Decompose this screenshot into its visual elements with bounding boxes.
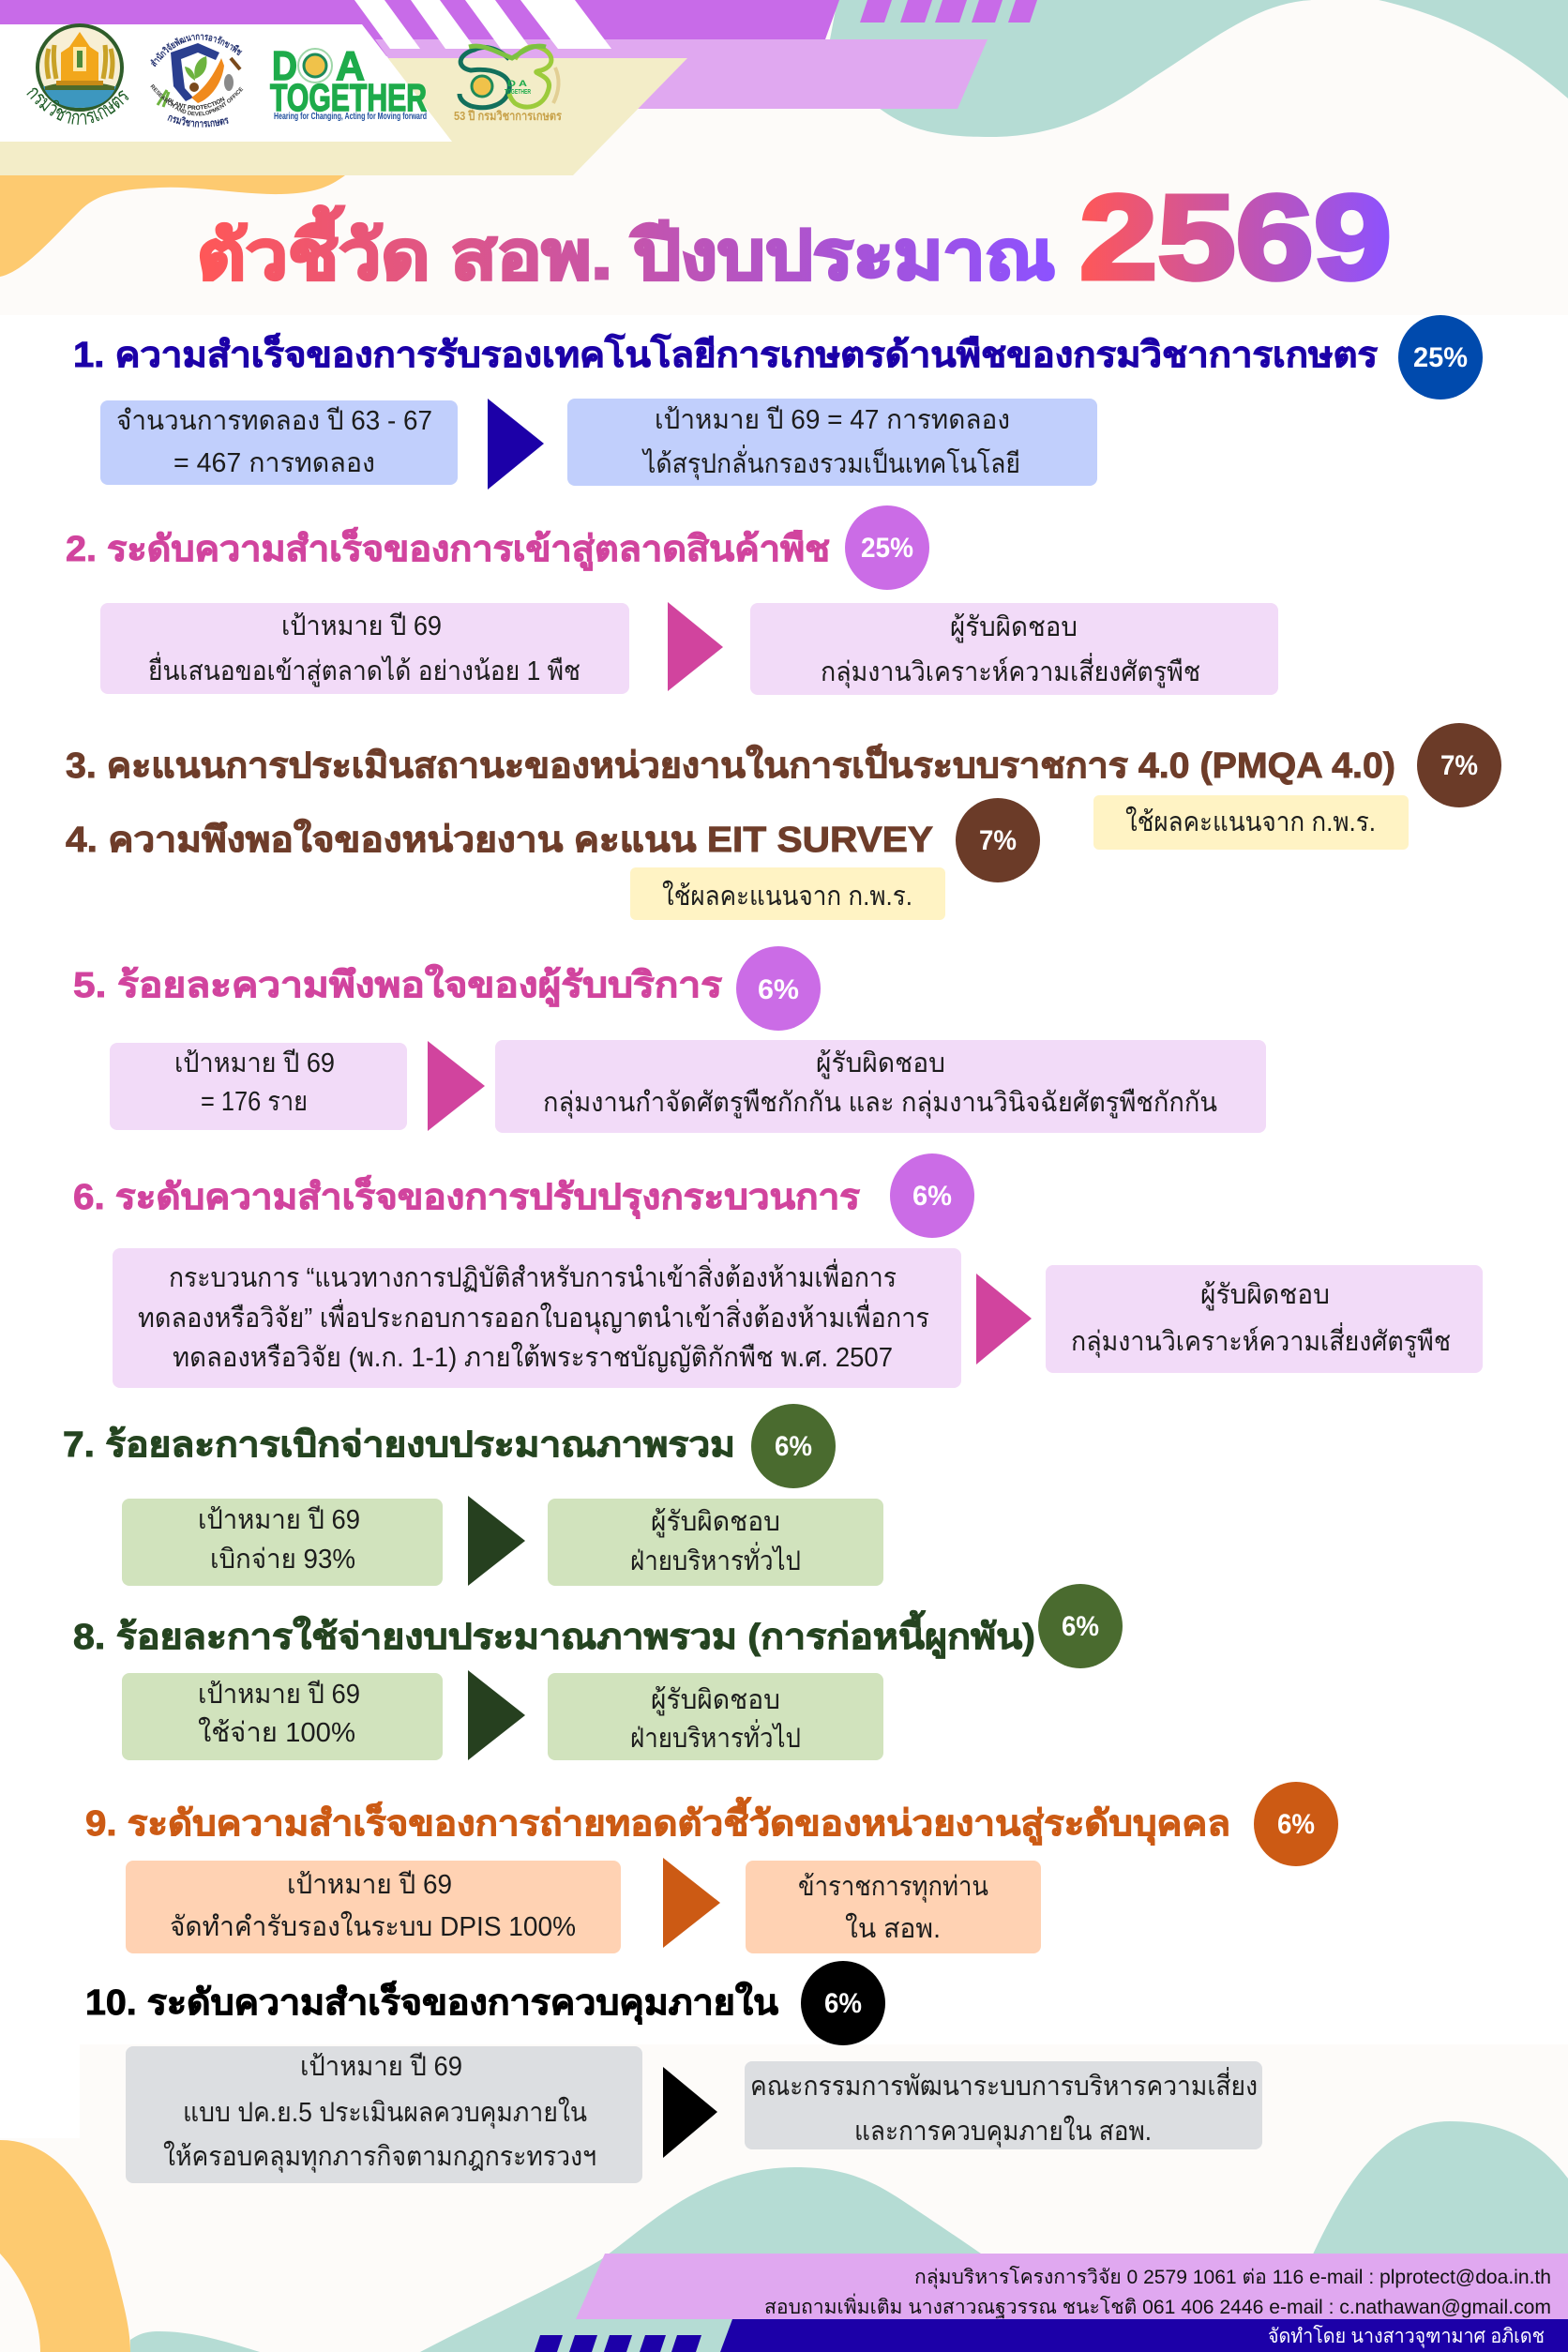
box: target: = 176 ราย [201, 1087, 308, 1117]
badge 25% [845, 505, 929, 590]
footer contact banner [576, 2254, 1568, 2352]
box: responsible: ผู้รับผิดชอบ [816, 1048, 945, 1079]
box: responsible: ใน สอพ. [845, 1912, 941, 1944]
panel: indicator 2 [66, 505, 1278, 695]
badge 6% [890, 1153, 974, 1238]
heading 1: 1. ความสำเร็จของการรับรองเทคโนโลยีการเกษตรด้านพืชของกรมวิชาการเกษตร [73, 333, 1379, 375]
icon: plant protection office logo: กรมวิชาการเกษตร [167, 114, 229, 128]
note: ใช้ผลคะแนนจาก ก.พ.ร. [1125, 806, 1376, 837]
badge 25% [1398, 315, 1483, 400]
panel: indicator 10 [85, 1961, 1262, 2183]
badge 6%: 6% [1062, 1611, 1099, 1642]
badge 6% [751, 1404, 836, 1488]
note [1093, 795, 1409, 850]
icon: plant protection office logo [150, 34, 244, 128]
arrow [468, 1496, 525, 1586]
note [630, 867, 945, 920]
icon: 53 years anniversary logo: D A [507, 79, 528, 88]
panel: indicator 4 [66, 798, 1040, 920]
badge 25%: 25% [1413, 342, 1468, 373]
box: responsible [746, 1861, 1041, 1953]
box: responsible: ฝ่ายบริหารทั่วไป [630, 1719, 801, 1754]
badge 6%: 6% [1277, 1809, 1315, 1840]
heading 4: 4. ความพึงพอใจของหน่วยงาน คะแนน EIT SURVEY [66, 819, 933, 860]
box: responsible: ข้าราชการทุกท่าน [798, 1872, 988, 1903]
box: process [113, 1248, 961, 1388]
footer decoration shapes [0, 2121, 1568, 2352]
box: target: เป้าหมาย ปี 69 = 47 การทดลอง [655, 405, 1010, 435]
contact line 2: สอบถามเพิ่มเติม นางสาวณฐวรรณ ชนะโชติ 061 406 2446 e-mail : c.nathawan@gmail.com [764, 2293, 1551, 2318]
box: responsible: คณะกรรมการพัฒนาระบบการบริหารความเสี่ยง [750, 2067, 1258, 2102]
box: target: ได้สรุปกลั่นกรองรวมเป็นเทคโนโลยี [641, 445, 1020, 480]
box: process: ทดลองหรือวิจัย” เพื่อประกอบการออกใบอนุญาตนำเข้าสิ่งต้องห้ามเพื่อการ [138, 1299, 929, 1334]
icon: 53 years anniversary logo [454, 46, 562, 123]
box: target: เป้าหมาย ปี 69 [174, 1048, 335, 1078]
badge 7% [1417, 723, 1501, 807]
box: experiments count [100, 400, 458, 485]
icon: 53 years anniversary logo: 53 ปี กรมวิชาการเกษตร [454, 109, 562, 123]
arrow [428, 1041, 485, 1131]
heading 3: 3. คะแนนการประเมินสถานะของหน่วยงานในการเป็นระบบราชการ 4.0 (PMQA 4.0) [66, 744, 1395, 786]
icon: 53 years anniversary logo: TOGETHER [505, 89, 531, 96]
box: target: ใช้จ่าย 100% [198, 1716, 355, 1748]
box: responsible: กลุ่มงานกำจัดศัตรูพืชกักกัน และ กลุ่มงานวินิจฉัยศัตรูพืชกักกัน [543, 1088, 1217, 1119]
box: target [567, 399, 1097, 486]
box: target: เป้าหมาย ปี 69 [300, 2052, 462, 2082]
icon: DOA Together logo: D [272, 43, 297, 89]
badge 6% [801, 1961, 885, 2045]
contact line 1: กลุ่มบริหารโครงการวิจัย 0 2579 1061 ต่อ 116 e-mail : plprotect@doa.in.th [914, 2266, 1551, 2289]
box: responsible [750, 603, 1278, 695]
heading 10: 10. ระดับความสำเร็จของการควบคุมภายใน [85, 1981, 778, 2025]
icon: DOA Together logo: Hearing for Changing, Acting for Moving forward [274, 112, 427, 122]
box: target [122, 1499, 443, 1586]
panel: indicator 5 [73, 946, 1266, 1133]
heading 6: 6. ระดับความสำเร็จของการปรับปรุงกระบวนการ [73, 1175, 861, 1219]
icon: DOA Together logo: A [336, 43, 365, 89]
author line: จัดทำโดย นางสาวจุฑามาศ อภิเดช [1268, 2325, 1545, 2348]
arrow [468, 1670, 525, 1760]
box: target [110, 1043, 407, 1130]
icon: plant protection office logo: PLANT PROTECTION [167, 97, 225, 111]
box: responsible: กลุ่มงานวิเคราะห์ความเสี่ยงศัตรูพืช [1071, 1322, 1451, 1358]
badge 7%: 7% [979, 825, 1017, 856]
box: target [122, 1673, 443, 1760]
box: process: ทดลองหรือวิจัย (พ.ก. 1-1) ภายใต้พระราชบัญญัติกักพืช พ.ศ. 2507 [173, 1341, 893, 1373]
icon: plant protection office logo: RESEARCH AND DEVELOPMENT OFFICE [150, 84, 244, 116]
badge 6%: 6% [758, 974, 799, 1005]
title [197, 171, 1392, 305]
panel: indicator 7 [63, 1404, 883, 1586]
heading 5: 5. ร้อยละความพึงพอใจของผู้รับบริการ [73, 964, 723, 1007]
box: responsible: ผู้รับผิดชอบ [1200, 1280, 1330, 1311]
box: target: แบบ ปค.ย.5 ประเมินผลควบคุมภายใน [183, 2096, 587, 2129]
box: target: เป้าหมาย ปี 69 [198, 1505, 360, 1535]
box: target: จัดทำคำรับรองในระบบ DPIS 100% [170, 1910, 576, 1942]
panel: indicator 6 [73, 1153, 1483, 1388]
panel: indicator 1 [73, 315, 1483, 490]
box: responsible: กลุ่มงานวิเคราะห์ความเสี่ยงศัตรูพืช [821, 653, 1200, 688]
badge 6% [1254, 1782, 1338, 1866]
heading 7: 7. ร้อยละการเบิกจ่ายงบประมาณภาพรวม [63, 1425, 735, 1465]
note: ใช้ผลคะแนนจาก ก.พ.ร. [662, 880, 912, 912]
icon: plant protection office logo: สำนักวิจัยพัฒนาการอารักขาพืช [150, 34, 242, 68]
panel: indicator 9 [85, 1782, 1338, 1953]
badge 6%: 6% [775, 1431, 812, 1462]
badge 6%: 6% [824, 1988, 862, 2019]
box: target: ให้ครอบคลุมทุกภารกิจตามกฎกระทรวงฯ [163, 2140, 596, 2173]
heading 8: 8. ร้อยละการใช้จ่ายงบประมาณภาพรวม (การก่อหนี้ผูกพัน) [73, 1610, 1035, 1659]
box: target [100, 603, 629, 694]
badge 7% [956, 798, 1040, 882]
box: target: เป้าหมาย ปี 69 [281, 611, 442, 641]
box: responsible [745, 2061, 1262, 2149]
badge 7%: 7% [1440, 750, 1478, 781]
heading 2: 2. ระดับความสำเร็จของการเข้าสู่ตลาดสินค้าพืช [66, 527, 830, 571]
box: target: เบิกจ่าย 93% [210, 1545, 355, 1575]
box: process: กระบวนการ “แนวทางการปฏิบัติสำหรับการนำเข้าสิ่งต้องห้ามเพื่อการ [169, 1259, 897, 1293]
heading 9: 9. ระดับความสำเร็จของการถ่ายทอดตัวชี้วัดของหน่วยงานสู่ระดับบุคคล [85, 1797, 1230, 1846]
badge 25%: 25% [861, 533, 913, 564]
icon: department of agriculture seal [26, 23, 129, 126]
icon: DOA Together logo [270, 43, 427, 122]
box: responsible [495, 1040, 1266, 1133]
badge 6% [736, 946, 821, 1031]
box: experiments count: จำนวนการทดลอง ปี 63 - 67 [116, 406, 432, 436]
title: ตัวชี้วัด สอพ. ปีงบประมาณ [197, 205, 1055, 294]
arrow [663, 2067, 717, 2158]
box: target [126, 1861, 621, 1953]
icon: department of agriculture seal: กรมวิชาการเกษตร [26, 88, 129, 126]
arrow [668, 602, 723, 691]
arrow [488, 399, 544, 490]
header decoration shapes [0, 0, 1568, 277]
box: responsible [1046, 1265, 1483, 1373]
box: responsible: ผู้รับผิดชอบ [651, 1507, 780, 1538]
box: target [126, 2046, 642, 2183]
box: responsible: ผู้รับผิดชอบ [651, 1685, 780, 1716]
box: target: เป้าหมาย ปี 69 [287, 1870, 452, 1900]
arrow [663, 1858, 720, 1948]
box: responsible [548, 1499, 883, 1586]
box: responsible [548, 1673, 883, 1760]
badge 6% [1038, 1584, 1123, 1668]
panel: indicator 3 [66, 723, 1501, 850]
title: 2569 [1079, 171, 1392, 305]
box: experiments count: = 467 การทดลอง [173, 448, 375, 478]
box: responsible: ผู้รับผิดชอบ [950, 612, 1078, 643]
badge 6%: 6% [912, 1181, 952, 1212]
box: responsible: ฝ่ายบริหารทั่วไป [630, 1542, 801, 1576]
box: target: เป้าหมาย ปี 69 [198, 1680, 360, 1710]
box: responsible: และการควบคุมภายใน สอพ. [854, 2115, 1152, 2148]
arrow [976, 1274, 1032, 1364]
icon: DOA Together logo: TOGETHER [270, 76, 427, 119]
box: target: ยื่นเสนอขอเข้าสู่ตลาดได้ อย่างน้อย 1 พืช [148, 652, 580, 687]
panel: indicator 8 [73, 1584, 1123, 1760]
